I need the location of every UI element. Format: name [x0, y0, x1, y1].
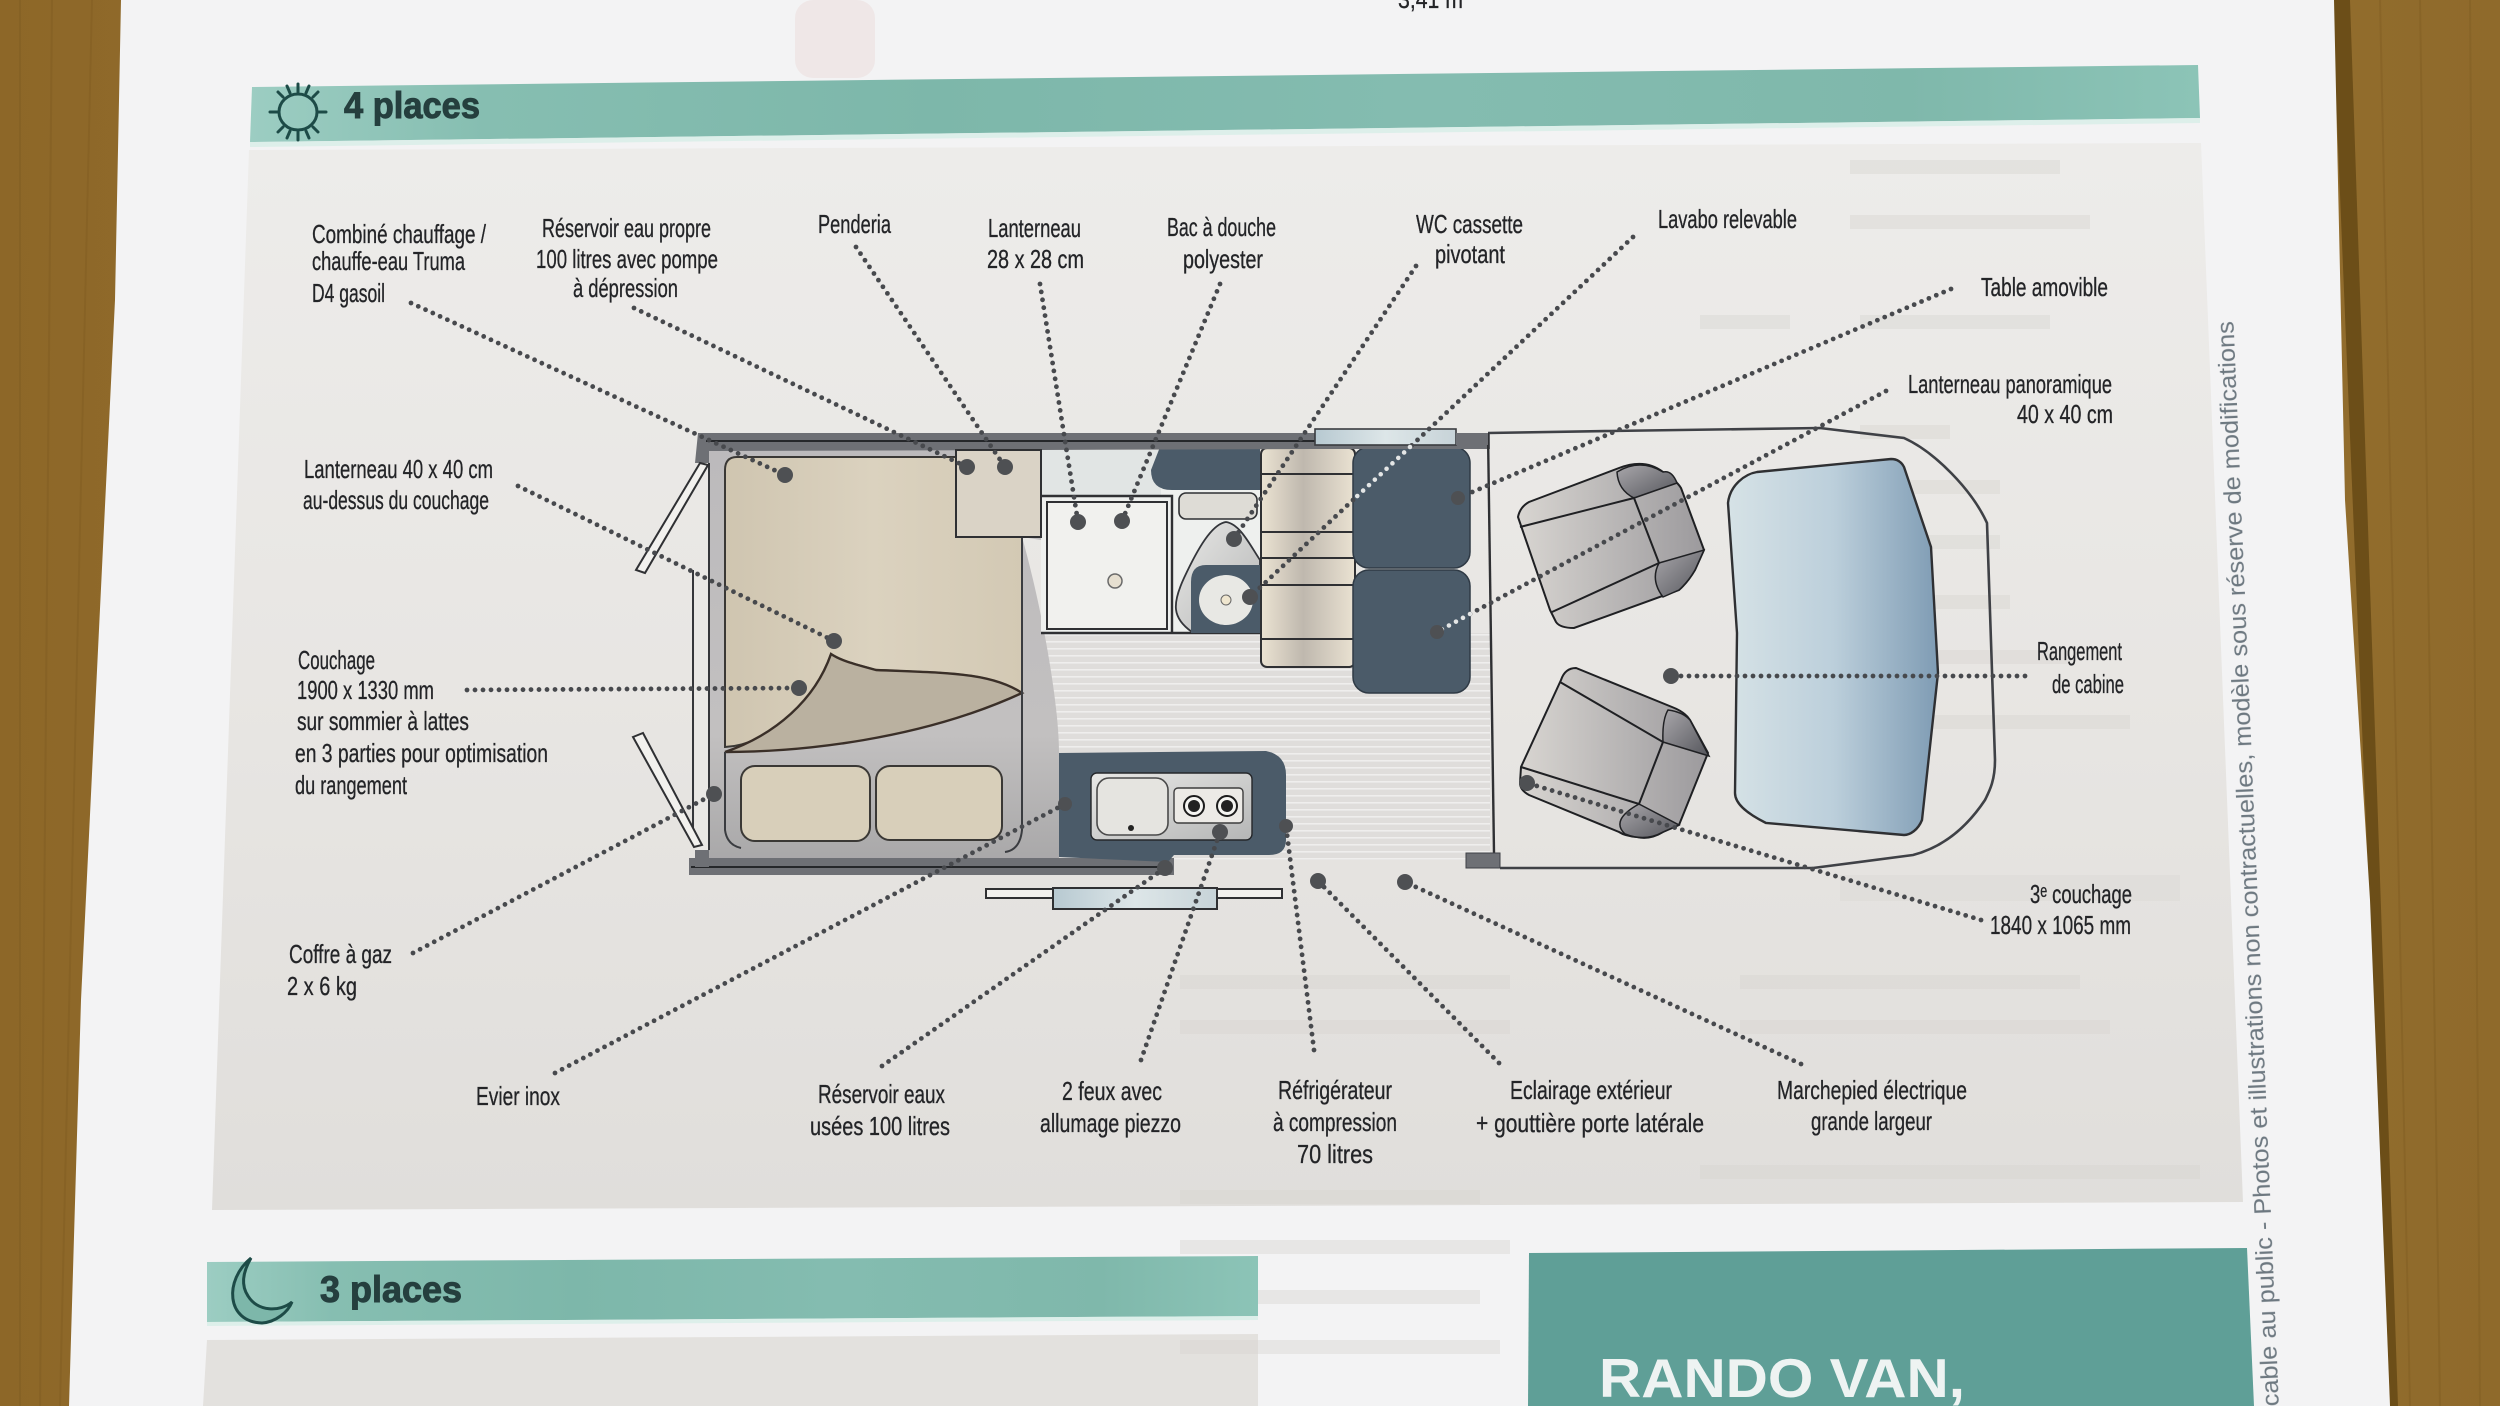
- callout: Bac à douche: Bac à douche: [1167, 212, 1276, 242]
- callout: Combiné chauffage: chauffe-eau Truma: [312, 246, 465, 276]
- vertical legal note: cable au public - Photos et illustrations non contractuelles, modèle sous réserve de modifications: [2213, 321, 2285, 1406]
- bed: [725, 457, 1022, 852]
- callout: Coffre à gaz: Coffre à gaz: [289, 939, 392, 969]
- callout: Evier inox: Evier inox: [476, 1081, 560, 1111]
- bleed-through text blocks: [1180, 160, 2200, 1354]
- rear storage cushions: [741, 766, 1002, 841]
- callout: Lanterneau 40 x 40: au-dessus du couchage: [303, 485, 489, 515]
- section band: 4 places: [250, 65, 2200, 147]
- left wall strip: [695, 570, 709, 850]
- callout: Coffre à gaz: [287, 786, 722, 1001]
- bench seat B: [1353, 570, 1470, 693]
- callout: Réservoir eaux usées: usées 100 litres: [810, 1111, 950, 1141]
- callout: WC cassette: pivotant: [1435, 239, 1506, 269]
- bench seat A: [1353, 447, 1470, 568]
- callout: Lavabo relevable: Lavabo relevable: [1658, 204, 1797, 234]
- callout: Lanterneau 28 x 28: Lanterneau: [988, 213, 1081, 243]
- top wall: [695, 433, 1490, 463]
- left wall line: [693, 463, 709, 850]
- bleed-through stain: [795, 0, 875, 78]
- callout: Lanterneau 28 x 28: 28 x 28 cm: [987, 244, 1084, 274]
- callout: Réservoir eaux usées: Réservoir eaux: [818, 1079, 945, 1109]
- teal promo box: [1528, 1248, 2254, 1406]
- callout: Marchepied électrique: Marchepied électrique: [1777, 1075, 1967, 1105]
- callout: Coffre à gaz: 2 x 6 kg: [287, 971, 357, 1001]
- callout: Eclairage extérieur: + gouttière porte latérale: [1476, 1108, 1704, 1138]
- callout: 2 feux: [1040, 824, 1228, 1138]
- bathroom: [1041, 450, 1260, 633]
- callout: Lanterneau panoramique: Lanterneau panoramique: [1908, 369, 2112, 399]
- basin unit: [1191, 565, 1260, 633]
- callout: Bac à douche: [1114, 212, 1276, 529]
- step: [986, 888, 1282, 909]
- rear door lower: [633, 733, 702, 847]
- callout: Eclairage extérieur: Eclairage extérieur: [1510, 1075, 1672, 1105]
- callout: Réservoir eau propre: 100 litres avec pompe: [536, 244, 718, 274]
- storage column: [1261, 448, 1355, 667]
- callout: Rangement de cabine: Rangement: [2037, 636, 2122, 666]
- callout: Lanterneau panoramique: [1430, 369, 2113, 639]
- panel: plan background: [212, 143, 2243, 1210]
- callout: Combiné chauffage: D4 gasoil: [312, 278, 385, 308]
- shower tray: [1047, 502, 1167, 629]
- callout: Réfrigérateur: [1273, 819, 1397, 1169]
- cab seat upper: [1518, 464, 1704, 628]
- floor: [1041, 633, 1490, 860]
- callout: Couchage: Couchage: [298, 645, 375, 675]
- callout: Réservoir eaux usées: [810, 860, 1173, 1141]
- callout: Couchage: sur sommier à lattes: [297, 706, 469, 736]
- callout: Lavabo relevable: [1242, 204, 1797, 605]
- callout: Marchepied électrique: [1397, 874, 1967, 1136]
- callout: Lanterneau 40 x 40: Lanterneau 40 x 40 cm: [304, 454, 493, 484]
- door post top: [1456, 433, 1488, 445]
- callout: Penderia: [818, 209, 1013, 475]
- icon: sun: [270, 84, 326, 140]
- callout: Couchage: en 3 parties pour optimisation: [295, 738, 548, 768]
- rear door upper: [636, 463, 708, 573]
- callout: Réfrigérateur: Réfrigérateur: [1278, 1075, 1392, 1105]
- wash shelf: [1179, 493, 1257, 519]
- wardrobe cabinet: [956, 450, 1041, 537]
- callout: Lanterneau 40 x 40: [303, 454, 842, 649]
- callout: Couchage: [295, 645, 807, 800]
- hob: [1174, 788, 1243, 823]
- callout: Evier inox: [476, 797, 1072, 1111]
- rear grey area: [709, 443, 1059, 860]
- callout: Réservoir eau propre: Réservoir eau propre: [542, 213, 711, 243]
- callout: 3e couchage: 3ᵉ couchage: [2030, 879, 2132, 909]
- callout: Penderia: Penderia: [818, 209, 891, 239]
- door post: [1466, 853, 1500, 868]
- callout: Table amovible: [1451, 272, 2108, 505]
- floor plan: [633, 428, 1995, 909]
- callout: Bac à douche: polyester: [1183, 244, 1263, 274]
- callout: Lanterneau panoramique: 40 x 40 cm: [2017, 399, 2113, 429]
- sliding window: [1315, 429, 1456, 445]
- callout: Rangement de cabine: [1663, 636, 2124, 699]
- callout: Lanterneau 28 x 28: [987, 213, 1086, 530]
- callout: 2 feux: 2 feux avec: [1062, 1076, 1162, 1106]
- callout: 3e couchage: [1519, 775, 2132, 940]
- callout: Combiné chauffage: Combiné chauffage /: [312, 219, 487, 249]
- callout: 3e couchage: 1840 x 1065 mm: [1990, 910, 2131, 940]
- bathroom cabinet: [1151, 447, 1260, 490]
- cab seat lower: [1520, 668, 1709, 838]
- section band: 3 places: [207, 1256, 1258, 1326]
- callout: Table amovible: Table amovible: [1981, 272, 2108, 302]
- panel: lower plan background: [203, 1334, 1258, 1406]
- cabin outline: [1488, 428, 1995, 868]
- callout: Rangement de cabine: de cabine: [2052, 669, 2124, 699]
- left wall: [695, 845, 709, 867]
- callout: Réfrigérateur: 70 litres: [1297, 1139, 1373, 1169]
- callout: Réservoir eau propre: à dépression: [573, 273, 678, 303]
- callout: Marchepied électrique: grande largeur: [1811, 1106, 1932, 1136]
- sink: [1097, 778, 1168, 835]
- bottom wall: [689, 858, 1174, 875]
- callout: Eclairage extérieur: [1310, 873, 1704, 1138]
- callout: WC cassette: WC cassette: [1416, 209, 1523, 239]
- kitchen unit: [1059, 751, 1286, 862]
- callout: Couchage: 1900 x 1330 mm: [297, 675, 434, 705]
- windscreen dash: [1728, 459, 1938, 835]
- callout: 2 feux: allumage piezzo: [1040, 1108, 1181, 1138]
- bed fold: [725, 654, 1022, 752]
- heading: 3 places: 3 places: [320, 1269, 462, 1310]
- callout: Réfrigérateur: à compression: [1273, 1107, 1397, 1137]
- cabin partition: [1488, 433, 1494, 853]
- callout: Combiné chauffage: [312, 219, 793, 483]
- callout: Réservoir eau propre: [536, 213, 975, 475]
- callout: Couchage: du rangement: [295, 770, 408, 800]
- callout: WC cassette: [1226, 209, 1523, 547]
- heading: 4 places: 4 places: [344, 85, 480, 126]
- WC: [1176, 522, 1260, 632]
- icon: crescent moon: [233, 1258, 292, 1323]
